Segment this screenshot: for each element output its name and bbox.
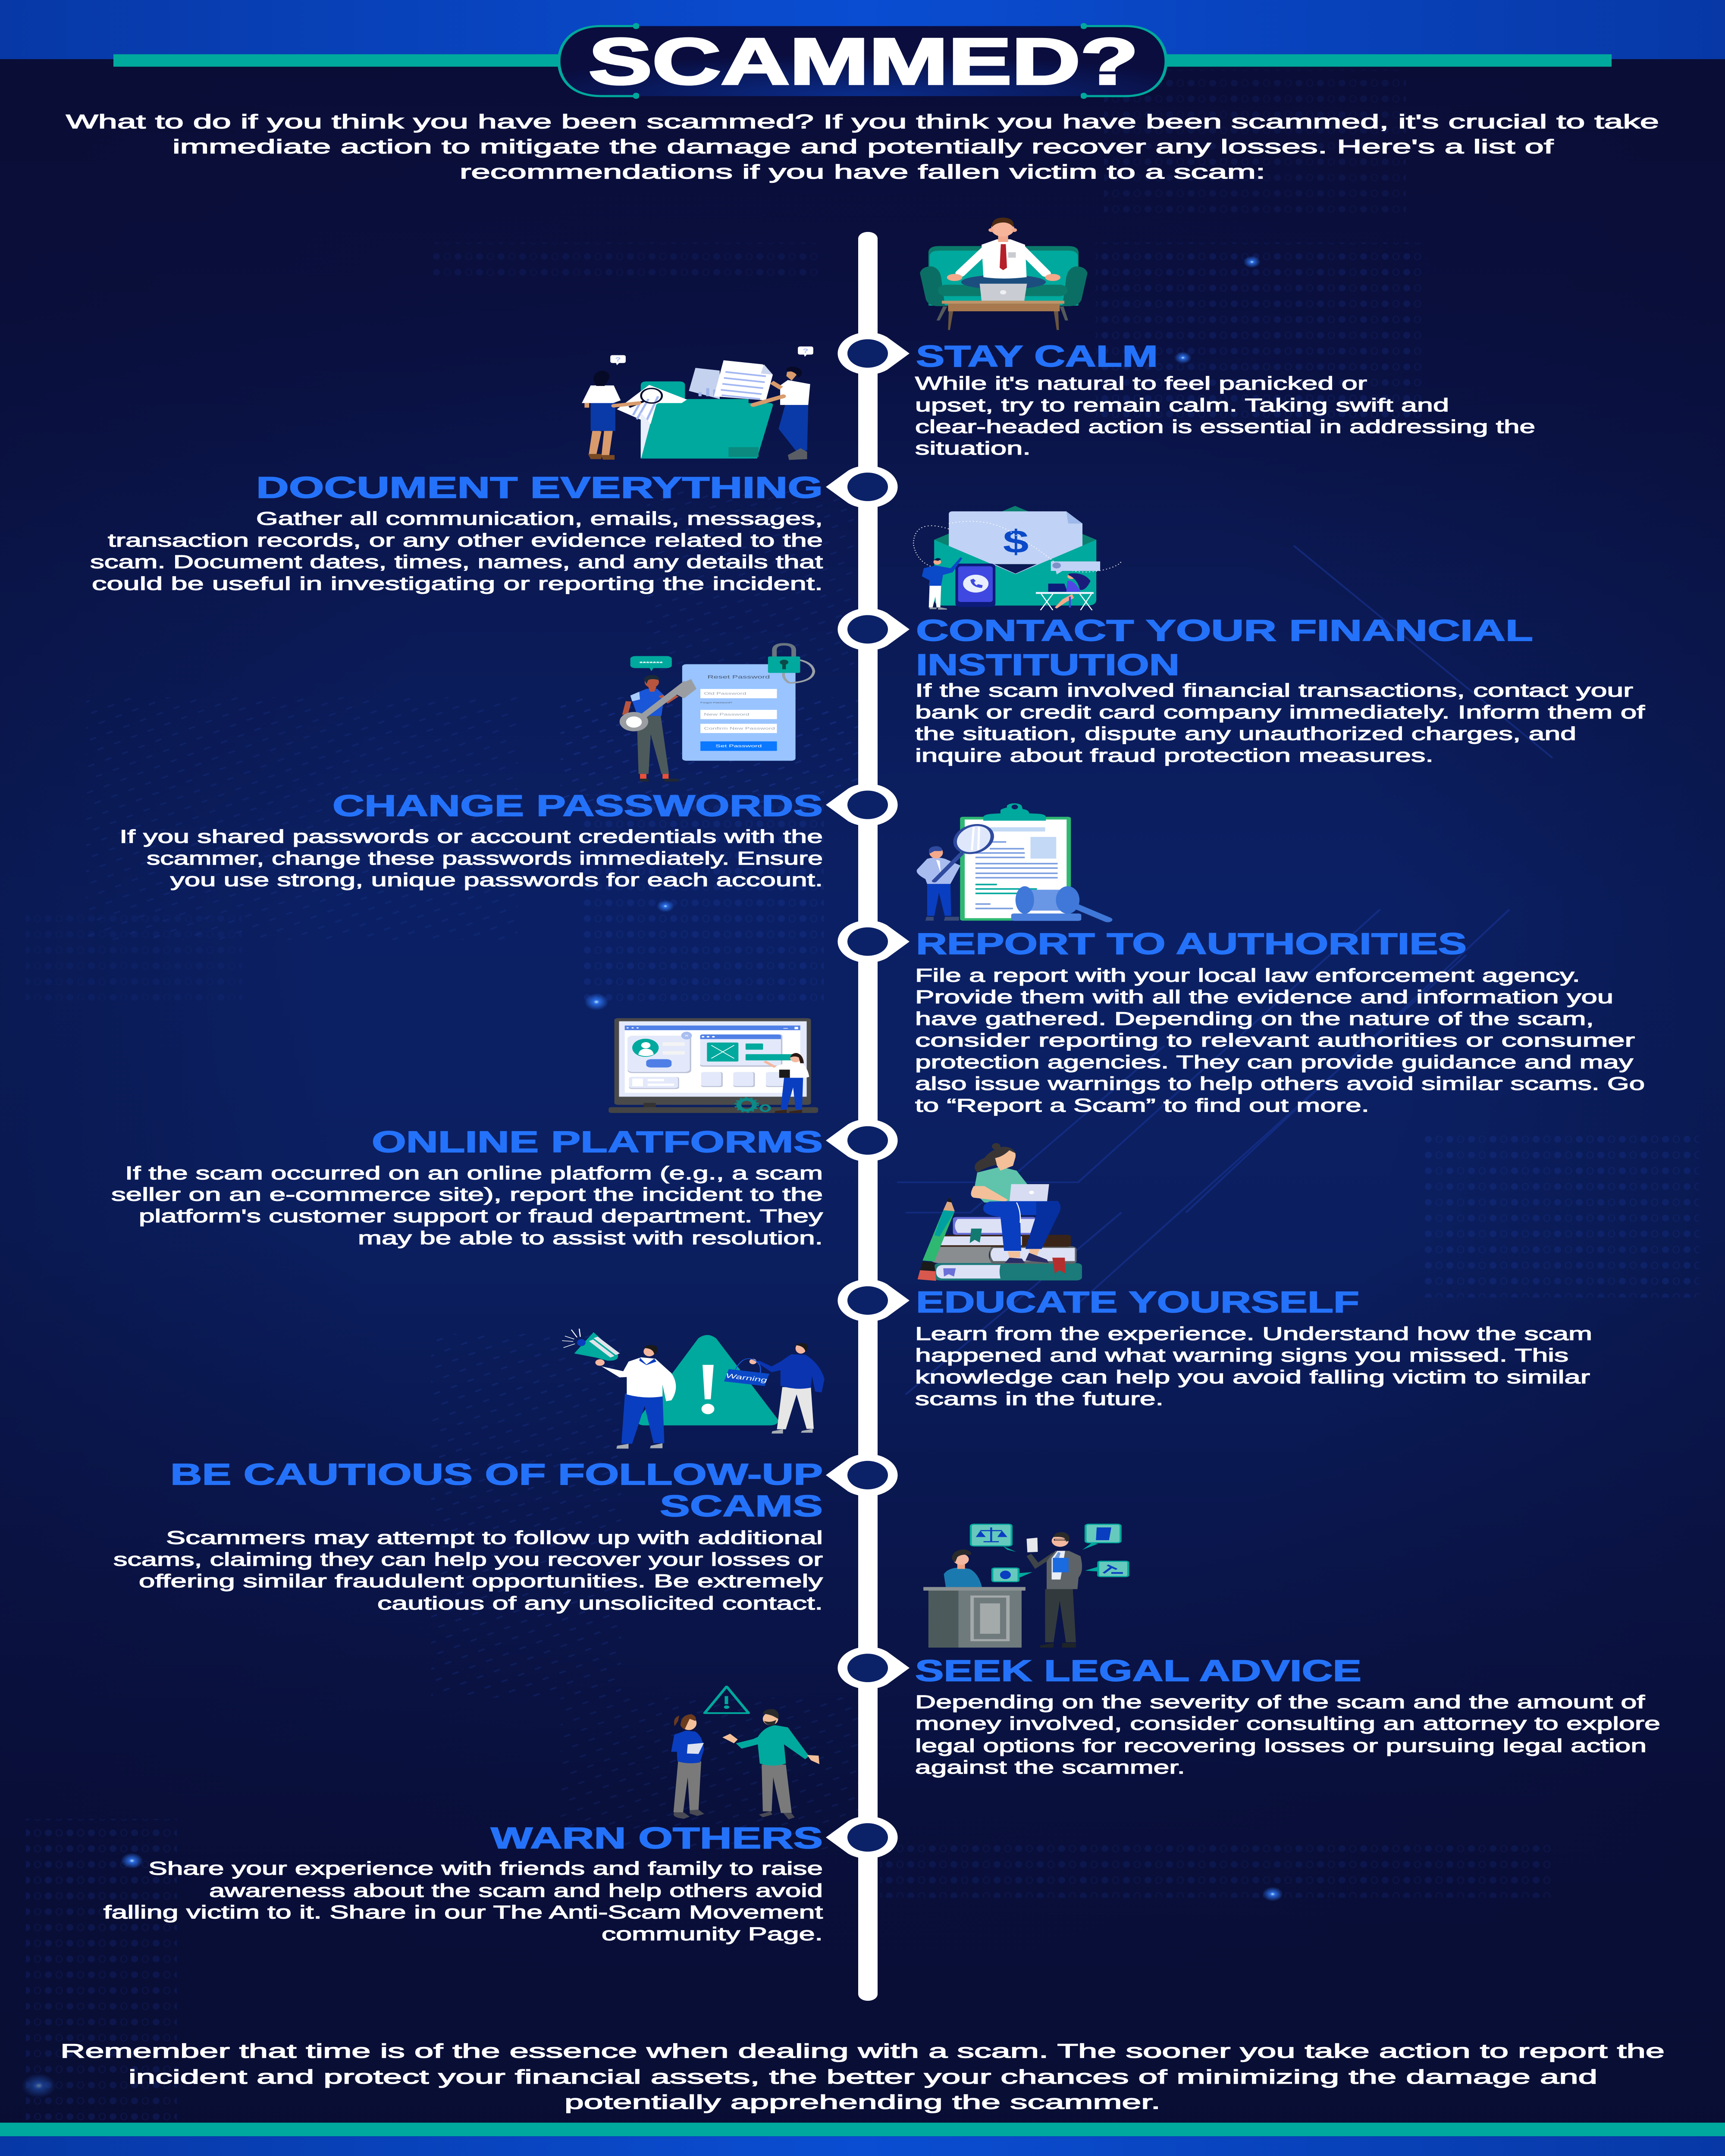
- heading: contact your financial institution: [916, 614, 1533, 682]
- text: online platforms body: seller on an e-commerce site), report the incident to the: [111, 1185, 823, 1205]
- panel: seek legal advice: [915, 1655, 1660, 1778]
- intro text: recommendations if you have fallen victim to a scam:: [460, 161, 1265, 183]
- text: contact institution body: the situation, dispute any unauthorized charges, and: [915, 724, 1576, 744]
- heading: change passwords: CHANGE PASSWORDS: [332, 790, 823, 823]
- text: report to authorities body: protection agencies. They can provide guidance and may: [915, 1052, 1634, 1072]
- panel: stay calm: [915, 340, 1535, 459]
- text: seek legal advice body: money involved, consider consulting an attorney to explore: [915, 1713, 1660, 1734]
- closing text: potentially apprehending the scammer.: [565, 2091, 1160, 2113]
- text: stay calm body: clear-headed action is essential in addressing the: [915, 417, 1535, 437]
- text: report to authorities body: [915, 965, 1645, 1116]
- text: report to authorities body: to “Report a Scam” to find out more.: [915, 1095, 1369, 1116]
- text: document everything body: [90, 508, 823, 594]
- icon: two people reviewing a document folder: ?: [615, 356, 621, 363]
- node: follow-up scams: [826, 1454, 898, 1496]
- text: follow-up scams body: scams, claiming they can help you recover your losses or: [113, 1549, 823, 1570]
- text: warn others body: awareness about the scam and help others avoid: [209, 1880, 823, 1901]
- panel: contact your financial institution: [915, 614, 1645, 766]
- heading: scammed: SCAMMED?: [589, 25, 1138, 98]
- text: stay calm body: While it's natural to feel panicked or: [915, 373, 1367, 394]
- icon: warning triangle with megaphone and two men: [562, 1329, 825, 1448]
- closing text: incident and protect your financial assets, the better your chances of minimizing the damage and: [129, 2065, 1597, 2088]
- icon: two people talking under a warning sign: [671, 1686, 819, 1819]
- icon: calm man meditating on sofa: [920, 218, 1088, 330]
- text: seek legal advice body: [915, 1692, 1660, 1778]
- node: contact financial institution: [837, 608, 910, 651]
- text: document everything body: Gather all communication, emails, messages,: [256, 508, 823, 529]
- text: report to authorities body: have gathered. Depending on the nature of the scam,: [915, 1009, 1594, 1029]
- text: contact institution body: inquire about fraud protection measures.: [915, 746, 1433, 766]
- text: follow-up scams body: offering similar fraudulent opportunities. Be extremely: [139, 1571, 823, 1592]
- node: seek legal advice: [837, 1647, 910, 1689]
- title pill: [559, 23, 1166, 99]
- heading: contact your financial institution: INSTITUTION: [916, 649, 1179, 682]
- text: educate yourself body: scams in the future.: [915, 1388, 1164, 1409]
- icon: reset password form, lock and man with key: [620, 644, 814, 782]
- icon: reset password form, lock and man with key: Reset Password: [707, 675, 770, 680]
- heading: educate yourself: EDUCATE YOURSELF: [916, 1286, 1359, 1319]
- text: educate yourself body: [915, 1323, 1592, 1409]
- node: change passwords: [826, 783, 898, 826]
- text: contact institution body: [915, 680, 1645, 766]
- heading: report to authorities: REPORT TO AUTHORITIES: [916, 928, 1467, 961]
- icon: envelope with money, phone and people: [913, 506, 1121, 610]
- closing text: [60, 2040, 1665, 2113]
- node: warn others: [826, 1816, 898, 1858]
- text: contact institution body: If the scam involved financial transactions, contact your: [915, 680, 1633, 701]
- text: stay calm body: [915, 373, 1535, 459]
- closing text: Remember that time is of the essence when dealing with a scam. The sooner you take action to report the: [60, 2040, 1665, 2062]
- text: seek legal advice body: legal options for recovering losses or pursuing legal action: [915, 1736, 1647, 1756]
- icon: reset password form, lock and man with key: Set Password: [715, 743, 762, 748]
- panel: change passwords: [119, 790, 823, 890]
- panel: document everything: [90, 471, 823, 594]
- icon: reset password form, lock and man with key: Old Password: [704, 692, 746, 696]
- text: online platforms body: [111, 1163, 823, 1248]
- text: report to authorities body: File a report with your local law enforcement agency.: [915, 965, 1580, 986]
- text: change passwords body: [119, 826, 823, 890]
- icon: online platform monitor with woman and gears: [608, 1018, 818, 1113]
- text: warn others body: [104, 1858, 823, 1944]
- heading: be cautious of follow-up scams: BE CAUTIOUS OF FOLLOW-UP: [170, 1458, 823, 1491]
- text: change passwords body: If you shared passwords or account credentials with the: [119, 826, 823, 847]
- node: document everything: [826, 466, 898, 508]
- text: follow-up scams body: cautious of any unsolicited contact.: [377, 1593, 823, 1614]
- text: stay calm body: upset, try to remain calm. Taking swift and: [915, 395, 1449, 416]
- node: educate yourself: [837, 1279, 910, 1322]
- text: online platforms body: may be able to assist with resolution.: [358, 1228, 823, 1248]
- text: online platforms body: If the scam occurred on an online platform (e.g., a scam: [125, 1163, 823, 1184]
- text: follow-up scams body: Scammers may attempt to follow up with additional: [166, 1527, 823, 1548]
- icon: envelope with money, phone and people: $: [1003, 523, 1029, 560]
- intro text: immediate action to mitigate the damage and potentially recover any losses. Here's a list of: [172, 135, 1554, 157]
- timeline spine: [858, 232, 878, 2001]
- text: follow-up scams body: [113, 1527, 823, 1614]
- teal ribbon: [113, 54, 1612, 67]
- heading: be cautious of follow-up scams: SCAMS: [660, 1490, 823, 1523]
- text: report to authorities body: consider reporting to relevant authorities or consumer: [915, 1030, 1635, 1051]
- icon: legal desk with receptionist and lawyer: [923, 1524, 1128, 1648]
- title banner: [113, 23, 1612, 99]
- heading: online platforms: ONLINE PLATFORMS: [372, 1125, 823, 1159]
- panel: online platforms: [111, 1125, 823, 1248]
- icon: reset password form, lock and man with key: New Password: [704, 712, 749, 717]
- text: educate yourself body: Learn from the experience. Understand how the scam: [915, 1323, 1592, 1344]
- heading: be cautious of follow-up scams: [170, 1458, 823, 1523]
- text: change passwords body: scammer, change these passwords immediately. Ensure: [147, 848, 823, 869]
- intro text: [66, 110, 1659, 183]
- text: online platforms body: platform's customer support or fraud department. They: [139, 1206, 823, 1226]
- bottom teal and blue bands: [0, 2123, 1725, 2156]
- heading: warn others: WARN OTHERS: [491, 1822, 823, 1855]
- panel: warn others: [104, 1822, 823, 1944]
- icon: reset password form, lock and man with key: *******: [640, 661, 663, 666]
- node: online platforms: [826, 1119, 898, 1162]
- text: educate yourself body: knowledge can help you avoid falling victim to similar: [915, 1367, 1590, 1388]
- text: document everything body: transaction records, or any other evidence related to the: [108, 530, 823, 551]
- text: contact institution body: bank or credit card company immediately. Inform them of: [915, 702, 1645, 723]
- text: stay calm body: situation.: [915, 438, 1031, 459]
- heading: contact your financial institution: CONTACT YOUR FINANCIAL: [916, 614, 1533, 648]
- text: seek legal advice body: Depending on the severity of the scam and the amount of: [915, 1692, 1645, 1712]
- icon: reset password form, lock and man with key: Forgot Password?: [700, 701, 732, 704]
- text: report to authorities body: Provide them with all the evidence and information you: [915, 987, 1613, 1007]
- text: report to authorities body: also issue warnings to help others avoid similar scams. Go: [915, 1073, 1645, 1094]
- node: stay calm: [837, 332, 910, 375]
- node: report to authorities: [837, 920, 910, 963]
- heading: seek legal advice: SEEK LEGAL ADVICE: [915, 1655, 1361, 1688]
- timeline nodes: [826, 332, 910, 1858]
- icon: online platform monitor with woman and gears: ×: [684, 1034, 689, 1038]
- icon: two people reviewing a document folder: ?: [803, 347, 809, 354]
- panel: report to authorities: [915, 928, 1645, 1116]
- text: warn others body: falling victim to it. Share in our The Anti-Scam Movement: [104, 1902, 823, 1923]
- text: warn others body: community Page.: [602, 1924, 823, 1944]
- heading: document everything: DOCUMENT EVERYTHING: [256, 471, 823, 505]
- panel: educate yourself: [915, 1286, 1592, 1409]
- panel: be cautious of follow-up scams: [113, 1458, 823, 1614]
- intro text: What to do if you think you have been scammed? If you think you have been scammed, it's crucial to take: [66, 110, 1659, 132]
- text: warn others body: Share your experience with friends and family to raise: [148, 1858, 823, 1879]
- text: document everything body: scam. Document dates, times, names, and any details that: [90, 552, 823, 572]
- icon: woman studying on pile of books: [918, 1143, 1082, 1281]
- top blue band: [0, 0, 1725, 59]
- icon: warning triangle with megaphone and two men: Warning: [724, 1372, 768, 1384]
- icon: two people reviewing a document folder: [582, 347, 813, 460]
- text: seek legal advice body: against the scammer.: [915, 1757, 1185, 1778]
- text: change passwords body: you use strong, unique passwords for each account.: [170, 870, 823, 890]
- icon: reset password form, lock and man with key: Confirm New Password: [704, 727, 775, 730]
- text: document everything body: could be useful in investigating or reporting the incident.: [92, 573, 823, 594]
- icon: clipboard report, magnifier and gavel: [917, 803, 1108, 921]
- text: educate yourself body: happened and what warning signs you missed. This: [915, 1345, 1568, 1366]
- heading: stay calm: STAY CALM: [916, 340, 1158, 373]
